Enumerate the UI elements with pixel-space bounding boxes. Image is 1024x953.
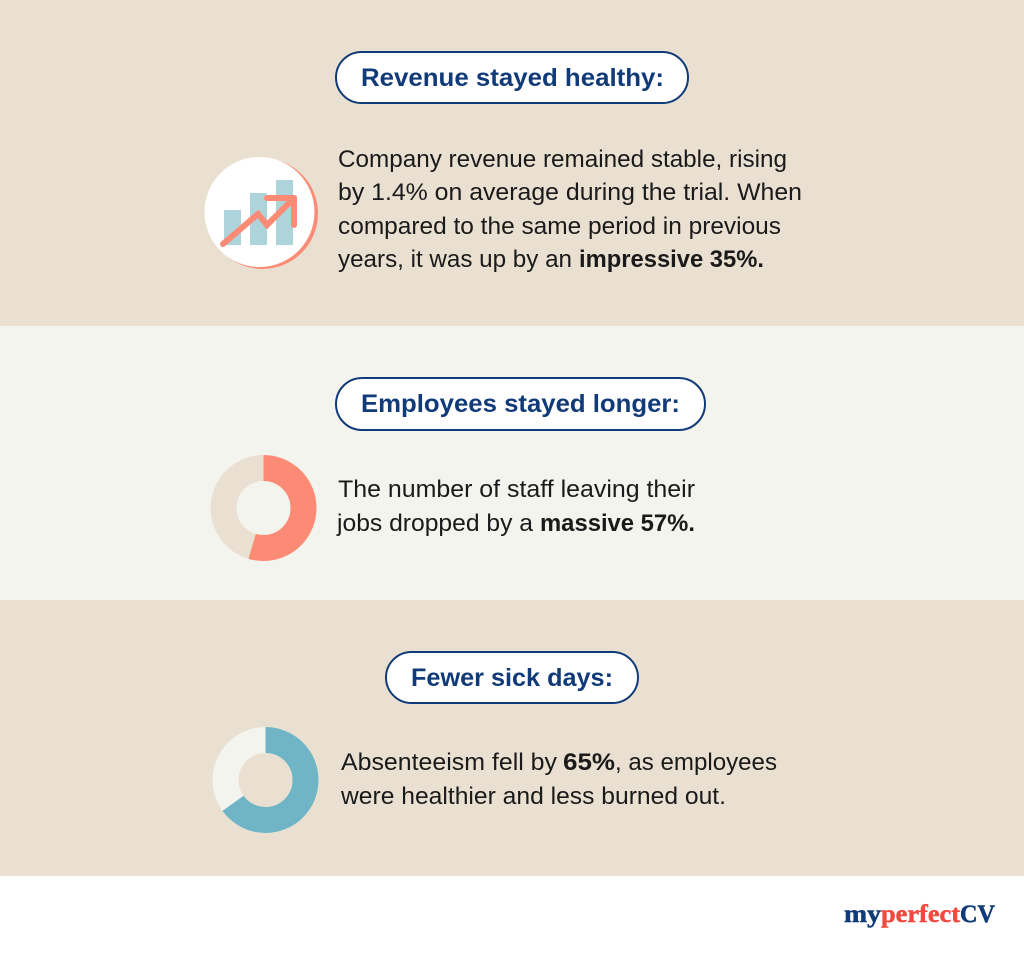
logo: myperfectCV: my — [844, 901, 882, 928]
text: sick days description: were healthier and less burned out. — [340, 783, 726, 810]
panel: sick days — [0, 600, 1024, 876]
text: sick days description — [340, 749, 777, 810]
text: revenue description: impressive 35%. — [579, 246, 764, 273]
text: sick days description: Absenteeism fell by — [341, 749, 557, 776]
panel: employees — [0, 326, 1024, 600]
text: employees description — [336, 476, 695, 537]
text: revenue description: compared to the same period in previous — [338, 213, 781, 240]
text: employees description: massive 57%. — [540, 510, 695, 537]
heading: revenue stayed healthy — [336, 52, 688, 103]
donut chart: 57% — [224, 468, 304, 548]
donut chart: 65% — [226, 740, 306, 820]
heading: revenue stayed healthy: Revenue stayed healthy: — [361, 64, 664, 92]
text: sick days description: , as employees — [615, 749, 777, 776]
text: employees description: The number of staff leaving their — [338, 476, 695, 503]
icon: rising bar chart — [204, 157, 318, 269]
text: revenue description — [338, 146, 802, 273]
logo: myperfectCV: CV — [960, 901, 995, 928]
heading: fewer sick days: Fewer sick days: — [411, 664, 613, 692]
logo: myperfectCV — [844, 901, 995, 928]
logo: myperfectCV: perfect — [881, 901, 961, 928]
text: revenue description: years, it was up by an — [338, 246, 572, 273]
heading: employees stayed longer: Employees stayed longer: — [361, 390, 680, 418]
panel: revenue — [0, 0, 1024, 326]
text: employees description: jobs dropped by a — [336, 510, 534, 537]
text: revenue description: by 1.4% on average during the trial. When — [338, 179, 802, 206]
heading: fewer sick days — [386, 652, 638, 703]
heading: employees stayed longer — [336, 378, 705, 430]
text: revenue description: Company revenue remained stable, rising — [338, 146, 787, 173]
text: sick days description: 65% — [563, 749, 615, 776]
